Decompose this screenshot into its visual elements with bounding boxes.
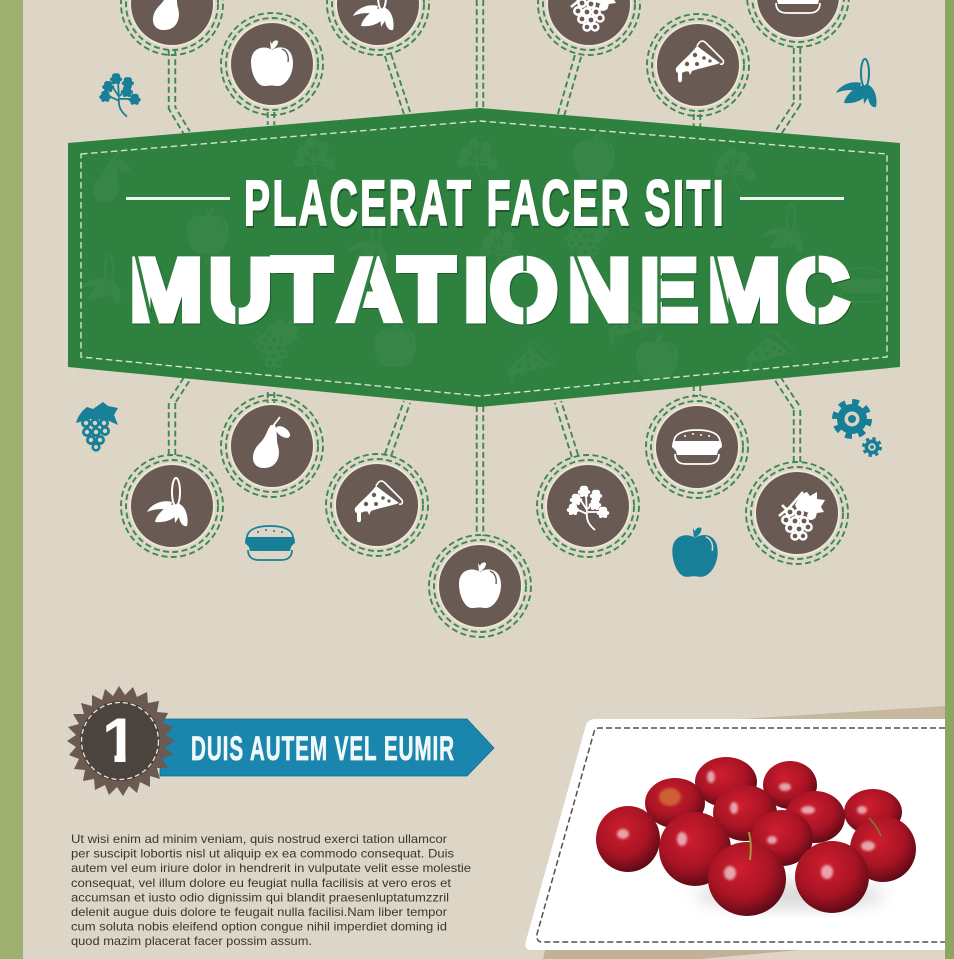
icon: teal gears [835, 402, 880, 456]
node: bottom grapes [746, 462, 848, 564]
body paragraph: quod mazim placerat facer possim assum. [71, 934, 312, 948]
icon: teal grapes [76, 402, 118, 452]
left border strip [0, 0, 23, 959]
stencil cuts [135, 250, 817, 328]
right border strip [945, 0, 954, 959]
body paragraph [71, 832, 471, 948]
card [525, 719, 945, 950]
T bar extensions [270, 255, 457, 273]
node: bottom pear [221, 395, 323, 497]
icon: teal apple [672, 528, 718, 577]
card shadow folds [740, 706, 945, 720]
body paragraph: per suscipit lobortis nisl ut aliquip ex ea commodo consequat. Duis [71, 847, 454, 861]
top connectors [172, 0, 797, 133]
node: top apple [221, 13, 323, 115]
node: top burger [747, 0, 849, 47]
ribbon heading: DUIS AUTEM VEL EUMIR [191, 730, 455, 768]
section ribbon [160, 719, 494, 776]
node: bottom burger [646, 396, 748, 498]
heading rule right [740, 197, 844, 200]
body paragraph: autem vel eum iriure dolor in hendrerit in vulputate velit esse molestie [71, 861, 471, 875]
banner stitching [81, 121, 887, 396]
banner shape [68, 108, 900, 407]
body paragraph: consequat, vel illum dolore eu feugiat nulla facilisis at vero eros et [71, 876, 452, 890]
icon: teal banana [836, 59, 877, 107]
heading line 2: MUTATIONEMC [130, 242, 849, 339]
photo card [525, 706, 945, 959]
card stitching [537, 728, 945, 942]
watermark icons [80, 133, 887, 384]
badge number: 1 [102, 706, 137, 776]
banner [68, 108, 900, 407]
body paragraph: cum soluta nobis eleifend option congue nihil imperdiet doming id [71, 920, 447, 934]
number badge [67, 686, 175, 796]
node: bottom banana [121, 455, 223, 557]
body paragraph: Ut wisi enim ad minim veniam, quis nostrud exerci tation ullamcor [71, 832, 447, 846]
bottom connectors [172, 377, 797, 536]
node: top pizza [647, 14, 749, 116]
node: top pear [121, 0, 223, 55]
body paragraph: accumsan et iusto odio dignissim qui blandit praesenluptatumzzril [71, 890, 449, 904]
node: top grapes [538, 0, 640, 55]
heading rule left [126, 197, 230, 200]
node: top banana [327, 0, 429, 55]
plums photo [596, 757, 916, 916]
node: bottom parsley [537, 455, 639, 557]
icon: teal parsley [99, 73, 141, 117]
node: bottom apple [429, 535, 531, 637]
icon: teal burger [245, 526, 295, 560]
body paragraph: delenit augue duis dolore te feugait nulla facilisi.Nam liber tempor [71, 905, 447, 919]
node: bottom pizza [326, 454, 428, 556]
